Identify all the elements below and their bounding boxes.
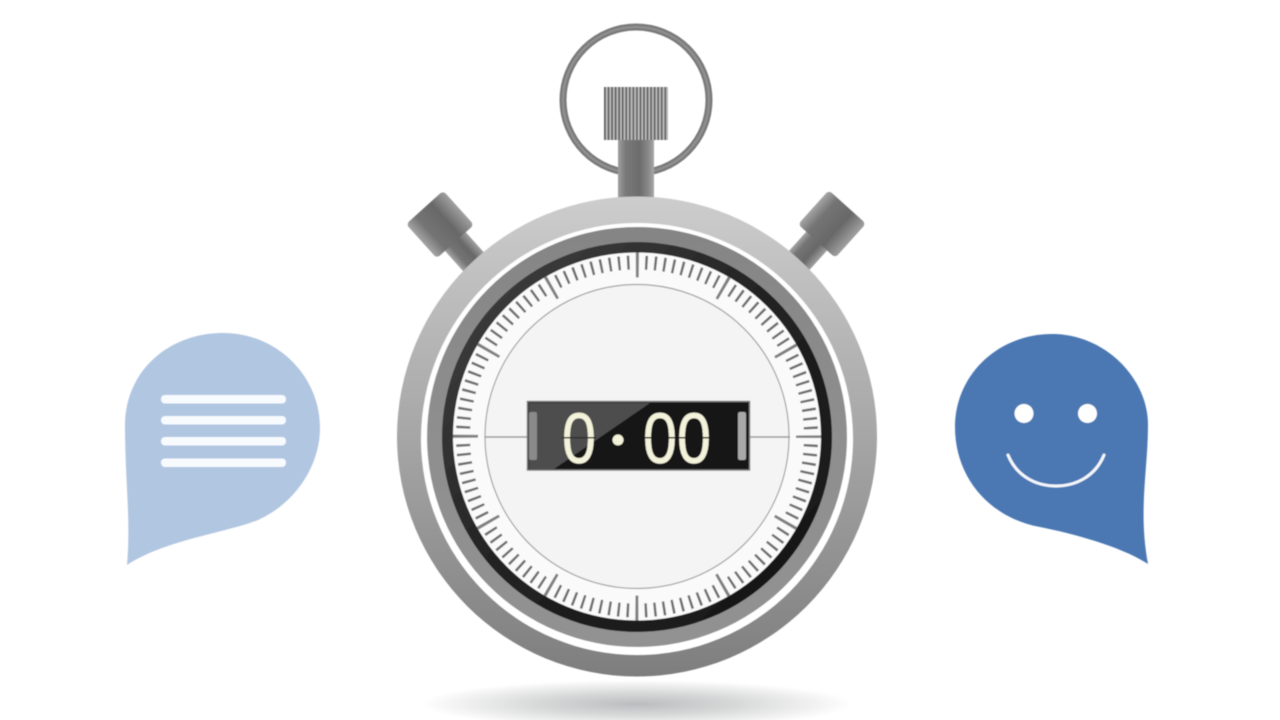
left pusher [406,191,500,287]
dial face [453,252,821,620]
ground shadow [421,680,853,720]
text lines [161,395,286,467]
speech bubble: smiley [955,334,1148,564]
bubble shape [125,333,320,565]
white gap ring [421,223,853,655]
major tick marks [466,265,808,608]
display reflection [529,403,650,469]
time reading: 0 [643,400,677,479]
black ring [442,242,832,632]
smiley eyes [1014,404,1097,423]
outer case ring [397,196,877,676]
horizontal dial line [485,436,790,438]
speech bubble: text lines [125,333,320,565]
bubble shape [955,334,1148,564]
stopwatch [397,27,877,676]
smiley mouth [1008,455,1104,486]
display side bars [529,412,746,460]
time reading: 0 [562,400,596,479]
digit segment seams [562,437,711,438]
display panel [528,402,750,470]
crown stem [618,139,654,201]
inner bezel [427,227,847,647]
centre dial disc [485,284,789,588]
top ring [563,27,709,173]
time reading [562,400,711,479]
time reading: 0 [677,400,711,479]
minor tick marks [463,262,811,610]
colon dot [612,434,624,446]
right pusher [772,190,866,287]
digital display [528,400,750,479]
knurled crown [604,87,668,140]
